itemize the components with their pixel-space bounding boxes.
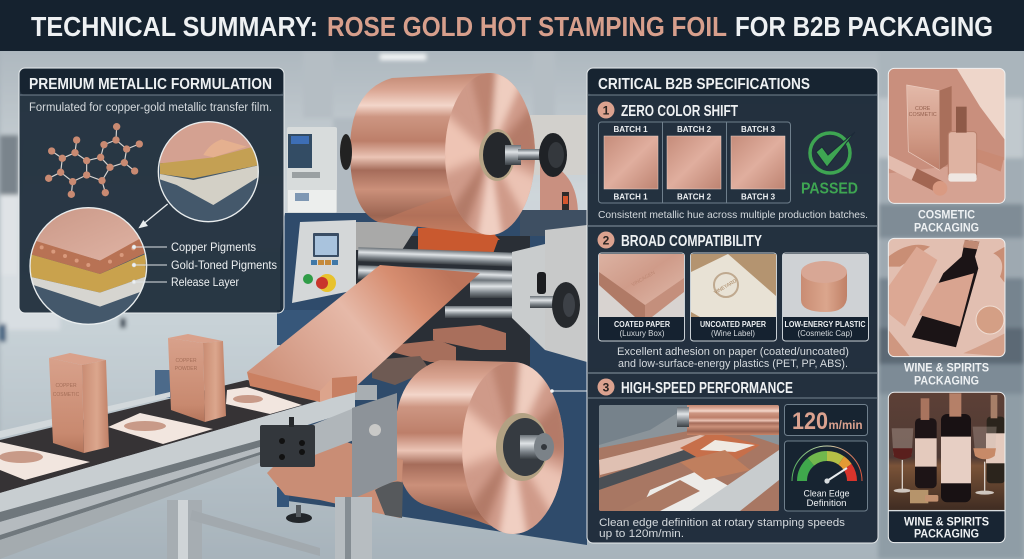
section 2: broad compatibility: Excellent adhesion on paper (coated/uncoated): [617, 346, 849, 358]
lower foil under conveyor: [267, 440, 403, 518]
foil web: [247, 265, 480, 402]
section 3: high-speed performance: HIGH-SPEED PERFORMANCE: [621, 380, 793, 397]
section 1: zero color shift: BATCH 2: [677, 192, 712, 202]
stat: 120 m/min: m/min: [828, 418, 862, 432]
title bar: TECHNICAL SUMMARY:: [31, 11, 318, 42]
side plate and stamping knob: [512, 225, 587, 362]
section 3: high-speed performance: Clean edge definition at rotary stamping speeds: [599, 517, 846, 529]
icon: passed check: PASSED: [801, 180, 858, 198]
section 2: broad compatibility: 2: [603, 234, 610, 248]
gauge: clean edge definition: Clean Edge: [804, 488, 850, 498]
card: uncoated paper: (Wine Label): [711, 329, 755, 338]
grey back frame: [520, 115, 587, 236]
layer labels: Release Layer: [171, 275, 239, 289]
card: wine and spirits packaging: [888, 238, 1005, 388]
section 1: zero color shift: [598, 102, 868, 221]
section 2: broad compatibility: [598, 232, 868, 370]
section 1: zero color shift: BATCH 3: [741, 125, 776, 134]
magnified circle: peeled foil: [157, 120, 263, 222]
panel heading: PREMIUM METALLIC FORMULATION: [29, 76, 272, 93]
section 3: high-speed performance: up to 120m/min.: [599, 528, 684, 540]
control panel: [292, 220, 356, 303]
layer labels: [132, 240, 277, 289]
leader line to specifications: [550, 389, 587, 393]
card: uncoated paper: UNCOATED PAPER: [700, 320, 766, 329]
rose gold box 2: [168, 334, 226, 422]
rose gold box 1: [49, 353, 109, 453]
card: wine and spirits packaging: WINE & SPIRITS: [904, 362, 989, 374]
rose gold box 2: COPPER: [175, 358, 197, 364]
orange foil behind rollers: [418, 228, 500, 262]
rose gold box 1: COPPER: [55, 383, 77, 389]
machine head plate: [356, 222, 420, 250]
section 2: broad compatibility: BROAD COMPATIBILITY: [621, 233, 763, 250]
card: coated paper: [598, 253, 684, 341]
layer labels: Gold-Toned Pigments: [171, 258, 277, 272]
card: cosmetic packaging: CORE: [915, 106, 931, 112]
top foil roll: [340, 65, 567, 243]
dark machine interior: [355, 236, 530, 366]
section 1: zero color shift: BATCH 2: [677, 125, 712, 134]
section 2: broad compatibility: and low-surface-energy plastics (PET, PP, ABS).: [618, 358, 848, 370]
card: wine and spirits packaging 2: PACKAGING: [914, 528, 979, 540]
section 1: zero color shift: Consistent metallic hue across multiple production batches.: [598, 209, 868, 221]
card: uncoated paper: VINEYARD: [713, 278, 738, 296]
gauge: clean edge definition: [784, 441, 868, 511]
section 1: zero color shift: BATCH 1: [613, 125, 648, 134]
bottom foil roll: [395, 353, 569, 543]
card: coated paper: VINCAGEN: [631, 270, 657, 288]
card: cosmetic packaging: [888, 68, 1005, 235]
layer labels: Copper Pigments: [171, 240, 256, 254]
icon: passed check: [801, 132, 858, 198]
card: coated paper: (Luxury Box): [620, 329, 665, 338]
rose gold box 1: COSMETIC: [53, 392, 80, 398]
blue machine body: [155, 213, 587, 545]
background control console: [287, 127, 337, 213]
card: low-energy plastic: (Cosmetic Cap): [798, 329, 853, 338]
section 1: zero color shift: BATCH 1: [613, 192, 648, 202]
panel: premium metallic formulation: [19, 68, 284, 324]
card: coated paper: COATED PAPER: [614, 320, 670, 329]
section 1: zero color shift: 1: [603, 104, 610, 118]
image: rotary stamping: [599, 405, 779, 511]
section 3: high-speed performance: [598, 378, 868, 540]
rollers: [358, 247, 522, 318]
card: low-energy plastic: LOW-ENERGY PLASTIC: [784, 320, 866, 329]
title bar: [0, 0, 1024, 51]
panel heading: CRITICAL B2B SPECIFICATIONS: [598, 76, 810, 93]
rose gold box 3 on conveyor: [247, 372, 357, 402]
card: wine and spirits packaging: PACKAGING: [914, 376, 979, 388]
gauge: clean edge definition: Definition: [806, 498, 846, 508]
title bar: ROSE GOLD HOT STAMPING FOIL: [327, 11, 727, 42]
card: cosmetic packaging: COSMETIC: [918, 210, 975, 222]
conveyor frame legs: [167, 497, 372, 559]
card: uncoated paper: [690, 253, 776, 341]
stamped foil blocks: [372, 325, 506, 385]
card: cosmetic packaging: COSMETIC: [909, 112, 937, 118]
rose gold box 2: POWDER: [175, 366, 198, 372]
magnified circle: foil layers: [27, 207, 150, 324]
printed cards on belt: [0, 387, 302, 480]
card: wine and spirits packaging 2: WINE & SPIRITS: [904, 516, 989, 528]
card: wine and spirits packaging 2: [888, 392, 1005, 543]
stat: 120 m/min: [784, 404, 868, 436]
section 1: zero color shift: BATCH 3: [741, 192, 776, 202]
card: low-energy plastic: [782, 253, 868, 341]
section 3: high-speed performance: 3: [603, 380, 610, 394]
stat: 120 m/min: 120: [792, 408, 828, 435]
icon: molecule: [45, 123, 143, 198]
arrow: zoom pointer: [138, 204, 168, 228]
panel: critical b2b specifications: [587, 68, 878, 543]
panel description: Formulated for copper-gold metallic transfer film.: [29, 102, 272, 114]
section 1: zero color shift: ZERO COLOR SHIFT: [621, 103, 738, 120]
conveyor: [0, 380, 397, 559]
card: cosmetic packaging: PACKAGING: [914, 222, 979, 234]
